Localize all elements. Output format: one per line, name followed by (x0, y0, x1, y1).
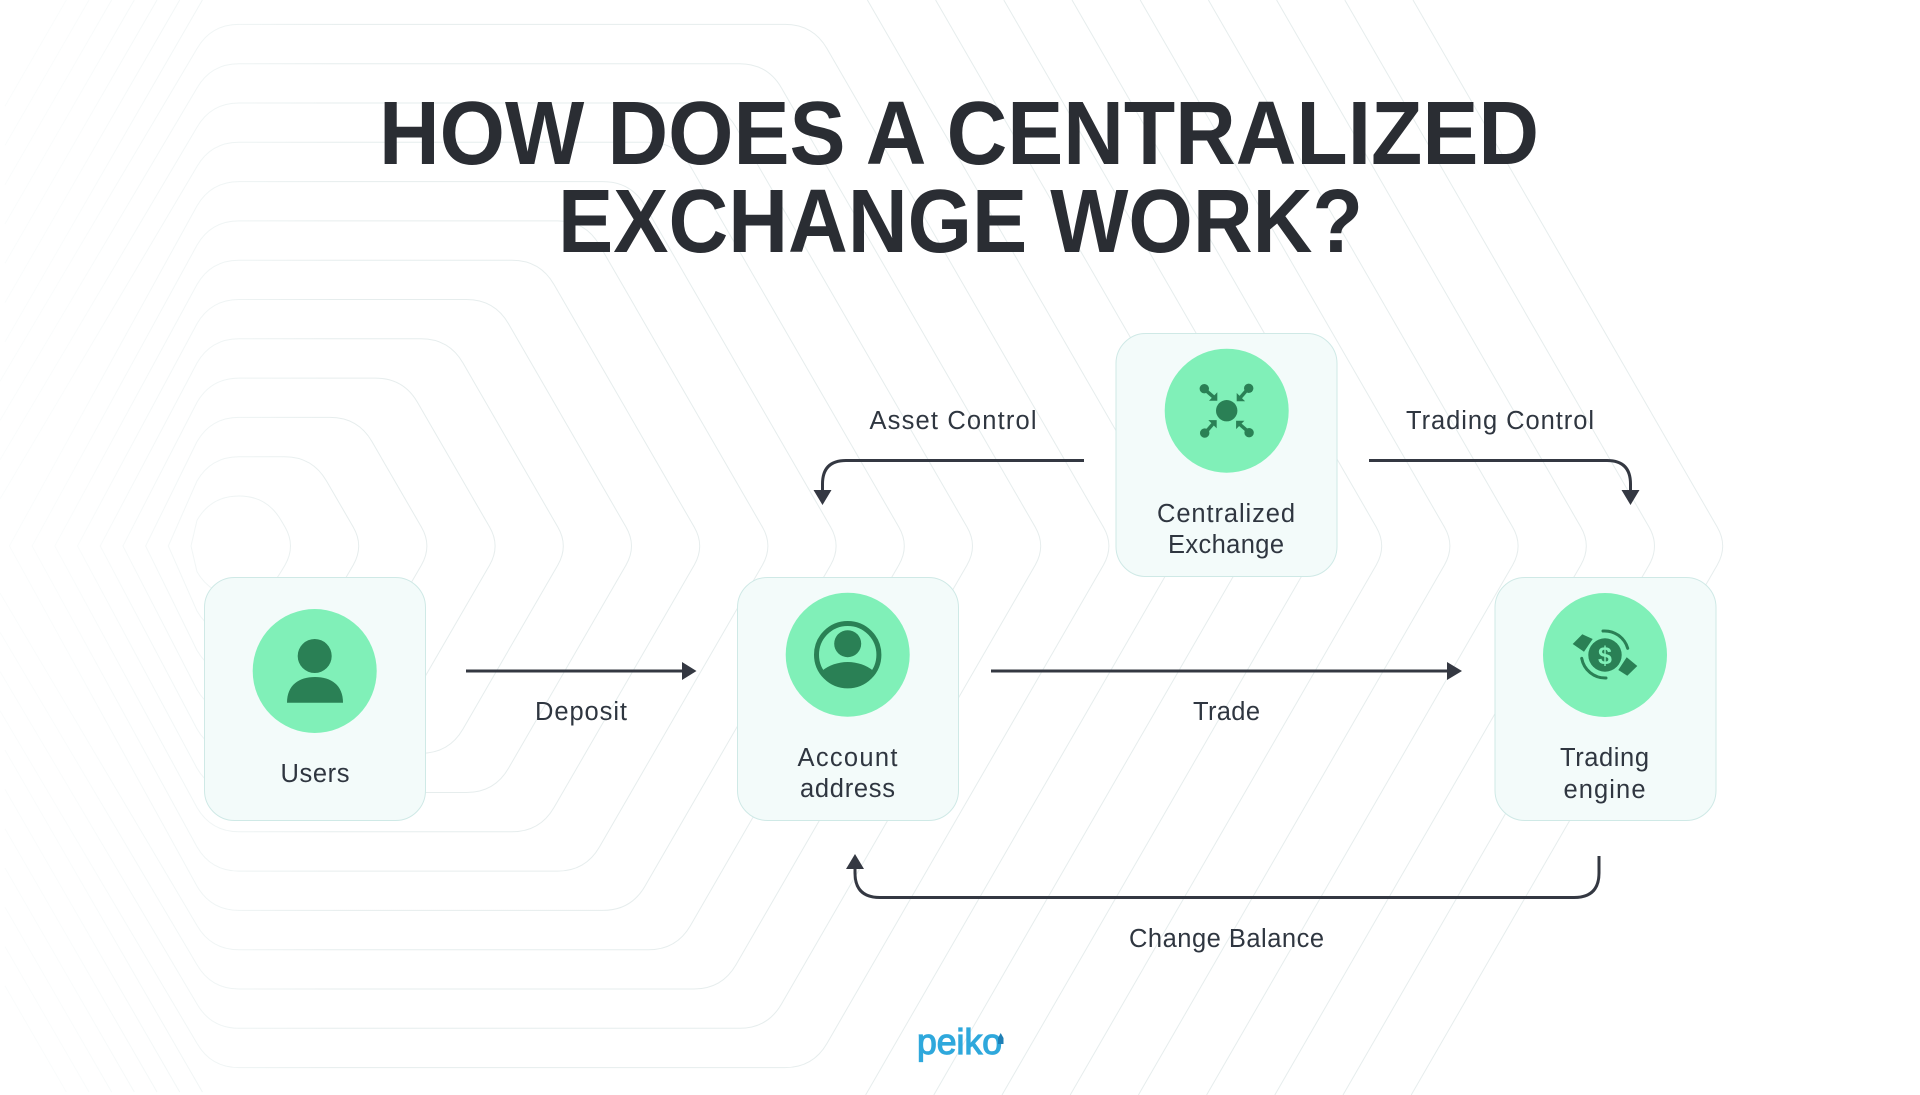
panel: trading engine (1495, 578, 1716, 820)
label: deposit: Deposit (535, 698, 627, 726)
icon: account (814, 621, 882, 688)
panel: centralized exchange (1116, 334, 1337, 576)
label: trading control: Trading Control (1406, 407, 1594, 435)
panel: centralized exchange: Exchange (1168, 531, 1284, 559)
label: asset control: Asset Control (870, 407, 1036, 435)
arrow: deposit (466, 662, 696, 680)
arrow: change balance (846, 854, 1599, 898)
arrow: trade (991, 662, 1462, 680)
label: trade: Trade (1193, 698, 1260, 726)
panel: users: Users (280, 760, 350, 788)
label: change balance: Change Balance (1129, 925, 1324, 953)
panel: users (204, 578, 426, 820)
panel: centralized exchange: Centralized (1157, 500, 1295, 528)
panel: account address: Account (798, 744, 898, 772)
panel: account address (738, 578, 958, 820)
icon: trading: $ (1598, 642, 1612, 670)
logo: peiko: peiko (917, 1021, 1002, 1062)
icon: converging arrows (1200, 384, 1254, 438)
arrow: trading control (1369, 460, 1640, 505)
icon: user (287, 639, 343, 703)
icon: trading (1573, 631, 1637, 678)
arrow: asset control (814, 460, 1084, 505)
title: HOW DOES A CENTRALIZED (379, 84, 1539, 184)
panel: trading engine: engine (1564, 776, 1646, 804)
panel: account address: address (800, 775, 895, 803)
title (379, 84, 1539, 272)
panel: trading engine: Trading (1560, 744, 1649, 772)
title: EXCHANGE WORK? (558, 172, 1363, 272)
